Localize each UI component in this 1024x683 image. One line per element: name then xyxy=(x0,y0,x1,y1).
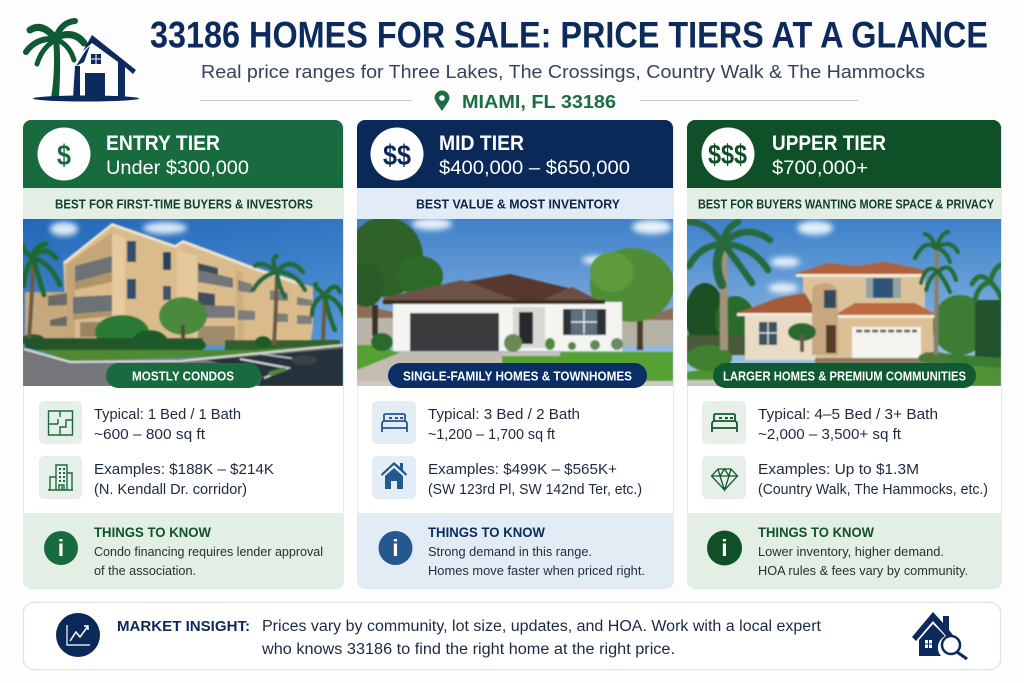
text: mid examples: (SW 123rd Pl, SW 142nd Ter, etc.) xyxy=(428,482,642,498)
text: entry examples: (N. Kendall Dr. corridor) xyxy=(94,482,247,498)
location line xyxy=(200,91,858,112)
mid things to know: Strong demand in this range. xyxy=(428,544,592,559)
text: entry typical xyxy=(94,407,241,443)
icon: condo building xyxy=(39,456,82,499)
market insight text xyxy=(261,618,822,658)
mid header: $400,000 – $650,000 xyxy=(439,157,630,179)
text: entry typical: ~600 – 800 sq ft xyxy=(94,427,205,443)
pill: mostly condos: MOSTLY CONDOS xyxy=(132,368,234,384)
text: upper examples xyxy=(758,462,988,498)
entry things to know xyxy=(24,513,344,588)
icon: diamond xyxy=(702,456,746,499)
icon: house xyxy=(372,456,416,499)
text: mid typical xyxy=(428,407,580,443)
mid things to know: i xyxy=(392,535,399,561)
card background xyxy=(24,120,344,588)
upper header: $$$ xyxy=(708,139,747,170)
text: mid examples xyxy=(428,462,642,498)
entry things to know: Condo financing requires lender approval xyxy=(94,544,323,559)
pill: larger homes: LARGER HOMES & PREMIUM COMMUNITIES xyxy=(723,368,966,384)
text: upper typical: ~2,000 – 3,500+ sq ft xyxy=(758,427,901,443)
icon: floor plan xyxy=(39,401,82,444)
panel: upper tier xyxy=(685,120,1003,588)
header logo: palm and house xyxy=(26,21,139,102)
text: upper typical xyxy=(758,407,938,443)
entry things to know: of the association. xyxy=(94,563,196,578)
text: upper typical: Typical: 4–5 Bed / 3+ Bath xyxy=(758,407,938,423)
card background xyxy=(688,120,1002,588)
entry header xyxy=(23,120,343,188)
market insight text: Prices vary by community, lot size, updates, and HOA. Work with a local expert xyxy=(262,618,822,635)
mid things to know: THINGS TO KNOW xyxy=(428,524,546,540)
pill: mostly condos xyxy=(106,363,261,388)
upper header: $700,000+ xyxy=(772,157,868,179)
upper things to know: HOA rules & fees vary by community. xyxy=(758,563,968,578)
icon: bed xyxy=(702,401,746,444)
photo: single-family home xyxy=(347,217,674,386)
mid best-for band xyxy=(358,188,674,219)
entry header: $ xyxy=(57,140,71,172)
text: upper examples: (Country Walk, The Hammocks, etc.) xyxy=(758,482,988,498)
text: entry examples xyxy=(94,462,274,498)
text: mid typical: ~1,200 – 1,700 sq ft xyxy=(428,427,555,443)
market insight label: MARKET INSIGHT: xyxy=(117,618,250,635)
entry best-for band xyxy=(24,188,344,219)
pill: single-family homes xyxy=(388,363,647,388)
text: upper examples: Examples: Up to $1.3M xyxy=(758,462,919,478)
mid best-for band: BEST VALUE & MOST INVENTORY xyxy=(416,198,621,212)
upper things to know: i xyxy=(721,535,728,561)
mid things to know xyxy=(358,513,674,588)
icon: growth chart xyxy=(56,613,100,657)
upper things to know xyxy=(688,513,1002,588)
card background xyxy=(358,120,674,588)
panel: market insight xyxy=(24,602,1000,670)
pill: larger homes xyxy=(713,363,976,388)
photo: large premium home xyxy=(685,219,1003,386)
mid header: $$ xyxy=(383,140,411,172)
icon: house with magnifier xyxy=(912,612,967,659)
entry header: Under $300,000 xyxy=(106,157,249,179)
photo: condo building xyxy=(21,219,345,386)
upper best-for band xyxy=(688,188,1002,219)
upper things to know: THINGS TO KNOW xyxy=(758,524,875,540)
text: entry typical: Typical: 1 Bed / 1 Bath xyxy=(94,407,241,423)
mid header: MID TIER xyxy=(439,132,524,155)
entry best-for band: BEST FOR FIRST-TIME BUYERS & INVESTORS xyxy=(55,198,313,212)
panel: mid tier xyxy=(347,120,674,588)
text: entry examples: Examples: $188K – $214K xyxy=(94,462,274,478)
mid header xyxy=(357,120,673,188)
market insight text: who knows 33186 to find the right home at the right price. xyxy=(261,641,675,658)
entry things to know: THINGS TO KNOW xyxy=(94,524,212,540)
location line: MIAMI, FL 33186 xyxy=(462,92,616,112)
upper header xyxy=(687,120,1001,188)
pill: single-family homes: SINGLE-FAMILY HOMES & TOWNHOMES xyxy=(403,368,632,384)
mid things to know: Homes move faster when priced right. xyxy=(428,563,645,578)
upper header: UPPER TIER xyxy=(772,132,886,155)
icon: bed xyxy=(372,401,416,444)
text: mid typical: Typical: 3 Bed / 2 Bath xyxy=(428,407,580,423)
entry header: ENTRY TIER xyxy=(106,132,220,155)
panel: entry tier xyxy=(21,120,345,588)
entry things to know: i xyxy=(58,535,64,561)
text: mid examples: Examples: $499K – $565K+ xyxy=(428,462,617,478)
subtitle: Real price ranges for Three Lakes, The Crossings, Country Walk & The Hammocks xyxy=(201,61,925,82)
upper things to know: Lower inventory, higher demand. xyxy=(758,544,944,559)
